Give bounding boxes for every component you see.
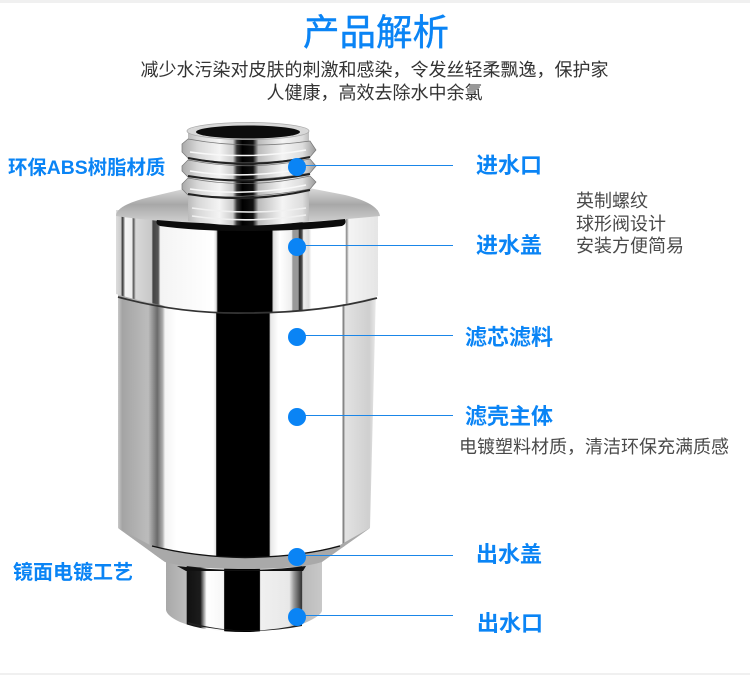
intro text xyxy=(140,60,608,102)
label: outlet cap: 出水盖 xyxy=(476,542,542,567)
label: inlet: 进水口 xyxy=(476,153,542,178)
callout lines xyxy=(300,166,453,616)
outlet neck xyxy=(166,558,322,632)
inlet opening xyxy=(187,122,309,140)
threaded inlet xyxy=(182,122,316,226)
inlet cap xyxy=(116,188,380,313)
filter housing xyxy=(116,122,380,632)
left label: mirror plating: 镜面电镀工艺 xyxy=(13,562,133,584)
left label: ABS material: 环保ABS树脂材质 xyxy=(8,157,165,179)
intro text: 人健康，高效去除水中余氯 xyxy=(266,82,482,102)
thread description xyxy=(576,191,684,256)
label: inlet cap: 进水盖 xyxy=(476,233,542,258)
housing description: 电镀塑料材质，清洁环保充满质感 xyxy=(459,437,729,457)
marker dots xyxy=(288,158,306,626)
main body xyxy=(118,285,376,571)
label: housing: 滤壳主体 xyxy=(465,404,553,429)
thread description: 英制螺纹 xyxy=(576,191,648,211)
label: filter media: 滤芯滤料 xyxy=(465,325,553,350)
thread description: 球形阀设计 xyxy=(576,214,666,234)
title: 产品解析 xyxy=(303,12,449,53)
label: outlet: 出水口 xyxy=(477,611,543,636)
thread description: 安装方便简易 xyxy=(576,236,684,256)
intro text: 减少水污染对皮肤的刺激和感染，令发丝轻柔飘逸，保护家 xyxy=(140,60,608,80)
